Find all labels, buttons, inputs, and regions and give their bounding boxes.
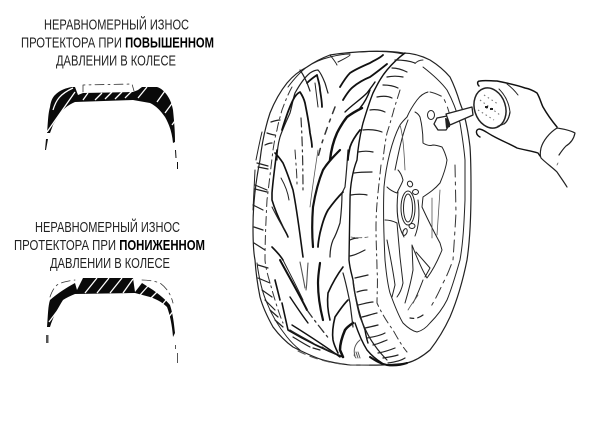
text: under-inflation caption [14,218,205,272]
text: over-inflation caption: ПРОТЕКТОРА ПРИ ПОВЫШЕННОМ [21,34,214,52]
text: under-inflation caption: ДАВЛЕНИИ В КОЛЕСЕ [50,255,170,272]
tyre second inner outline [288,51,403,87]
diagram: over-inflated tread profile [45,84,178,169]
rim outer ring [384,67,465,332]
sidewall ribs [350,60,415,256]
shirt cuff [540,128,575,187]
illustration: hand with pressure gauge [428,81,575,187]
gauge stem [446,107,473,125]
tread: lower converging grooves [280,260,307,310]
text: over-inflation caption: ДАВЛЕНИИ В КОЛЕСЕ [56,52,176,70]
left shoulder blocks [253,120,283,327]
text: over-inflation caption: НЕРАВНОМЕРНЫЙ ИЗНОС [44,16,189,34]
valve stem [428,110,434,120]
diagram: under-inflated tread profile [46,278,178,363]
text: over-inflation caption [21,16,214,70]
hand outline [478,81,557,127]
wheel spokes [395,112,447,303]
tyre outer outline [253,51,471,365]
wheel hub [401,191,415,225]
illustration: tyre and wheel [253,51,471,365]
tread: long central grooves [312,150,340,247]
tread: upper U-shaped grooves [277,70,328,160]
tread: sweeping grooves upper right [340,55,383,87]
gauge dial [469,84,511,132]
text: under-inflation caption: ПРОТЕКТОРА ПРИ ПОНИЖЕННОМ [14,237,205,254]
text: under-inflation caption: НЕРАВНОМЕРНЫЙ ИЗНОС [35,218,180,236]
valve cap [434,116,450,130]
shoulder line between tread and sidewall [349,53,405,343]
sidewall dashed line [383,90,400,160]
